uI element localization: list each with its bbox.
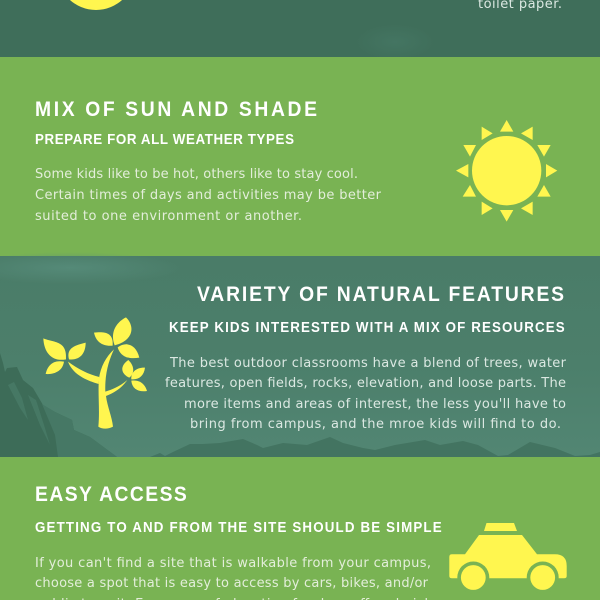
body text: If you can't find a site that is walkable from your campus, bbox=[35, 556, 431, 571]
icon: tree bbox=[43, 317, 147, 429]
body text: more items and areas of interest, the less you'll have to bbox=[184, 397, 566, 412]
panel: mix of sun and shade bbox=[0, 57, 600, 256]
body text: features, open fields, rocks, elevation, and loose parts. The bbox=[165, 376, 566, 391]
icon: taxi car bbox=[449, 523, 567, 594]
icon: yellow circle bbox=[57, 0, 135, 10]
body text bbox=[35, 556, 432, 600]
subheading: KEEP KIDS INTERESTED WITH A MIX OF RESOURCES bbox=[169, 318, 565, 335]
body text: choose a spot that is easy to access by cars, bikes, and/or bbox=[35, 576, 429, 591]
panel: top banner bbox=[0, 0, 600, 60]
heading: EASY ACCESS bbox=[35, 483, 187, 506]
body text: bring from campus, and the mroe kids will find to do. bbox=[190, 417, 561, 432]
body text: Some kids like to be hot, others like to stay cool. bbox=[35, 167, 358, 182]
panel: easy access bbox=[0, 457, 600, 600]
body text: suited to one environment or another. bbox=[35, 209, 302, 224]
heading: MIX OF SUN AND SHADE bbox=[35, 98, 317, 121]
icon: sun bbox=[456, 120, 557, 222]
body text: Certain times of days and activities may be better bbox=[35, 188, 382, 203]
body text: The best outdoor classrooms have a blend of trees, water bbox=[169, 356, 567, 371]
body text bbox=[165, 356, 567, 432]
subheading: PREPARE FOR ALL WEATHER TYPES bbox=[35, 130, 294, 147]
subheading: GETTING TO AND FROM THE SITE SHOULD BE SIMPLE bbox=[35, 518, 442, 535]
heading: VARIETY OF NATURAL FEATURES bbox=[197, 283, 564, 306]
body text bbox=[35, 167, 382, 224]
panel: variety of natural features bbox=[0, 252, 600, 457]
